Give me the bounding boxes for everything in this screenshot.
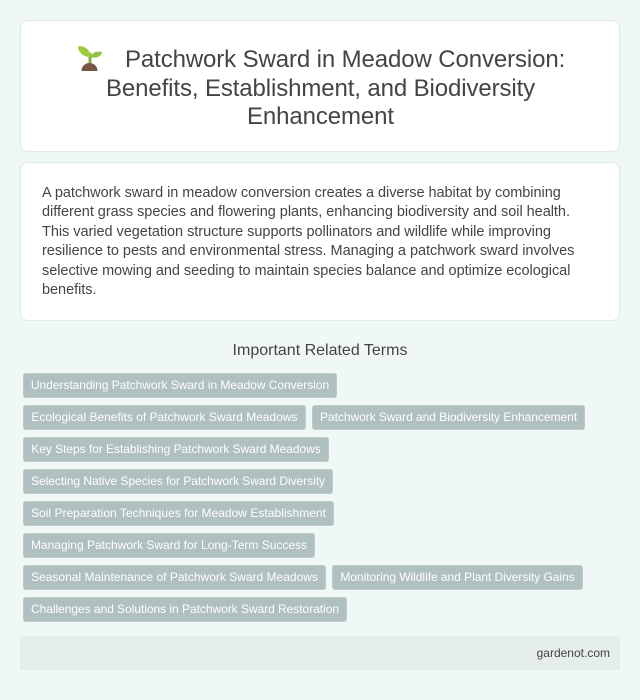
- tag: Key Steps for Establishing Patchwork Sward Meadows: [31, 442, 321, 456]
- text block: description paragraph: A patchwork sward in meadow conversion creates a diverse habitat by combining: [42, 185, 561, 201]
- text block: description paragraph: This varied vegetation structure supports pollinators and wildlife while improving: [42, 224, 551, 240]
- tag: Seasonal Maintenance of Patchwork Sward Meadows: [31, 570, 318, 584]
- text block: description paragraph: selective mowing and seeding to maintain species balance and optimize ecological: [42, 263, 570, 279]
- tag: Soil Preparation Techniques for Meadow Establishment: [31, 506, 326, 520]
- tag: Challenges and Solutions in Patchwork Sward Restoration: [31, 602, 339, 616]
- title: [106, 46, 565, 130]
- tag: [23, 533, 315, 558]
- text block: description paragraph: benefits.: [42, 282, 96, 298]
- footer text: source: gardenot.com: [537, 646, 610, 660]
- tag: [332, 565, 583, 590]
- tag: [23, 597, 347, 622]
- text block: description paragraph: different grass species and flowering plants, enhancing biodiversity and soil health.: [42, 204, 570, 220]
- footer: [20, 636, 620, 670]
- title: Patchwork Sward in Meadow Conversion:: [125, 46, 565, 73]
- tag: [23, 405, 306, 430]
- tag: Ecological Benefits of Patchwork Sward Meadows: [31, 410, 298, 424]
- tag: [23, 437, 329, 462]
- panel: description: [20, 162, 620, 321]
- text block: description paragraph: [42, 185, 574, 298]
- tag: [312, 405, 585, 430]
- heading: important related terms: Important Related Terms: [233, 342, 407, 359]
- title: Benefits, Establishment, and Biodiversity: [106, 75, 535, 102]
- tag: Understanding Patchwork Sward in Meadow Conversion: [31, 378, 329, 392]
- text block: description paragraph: resilience to pests and environmental stress. Managing a patchwork sward involves: [42, 243, 574, 259]
- tag: [23, 469, 333, 494]
- tag: Monitoring Wildlife and Plant Diversity Gains: [340, 570, 575, 584]
- tag: Managing Patchwork Sward for Long-Term Success: [31, 538, 307, 552]
- tag list: [23, 373, 585, 622]
- icon: sprout: [78, 46, 102, 71]
- title: Enhancement: [247, 103, 394, 130]
- panel: title card: [20, 20, 620, 152]
- tag: [23, 373, 337, 398]
- tag: [23, 501, 334, 526]
- tag: Patchwork Sward and Biodiversity Enhancement: [320, 410, 577, 424]
- tag: Selecting Native Species for Patchwork Sward Diversity: [31, 474, 325, 488]
- tag: [23, 565, 326, 590]
